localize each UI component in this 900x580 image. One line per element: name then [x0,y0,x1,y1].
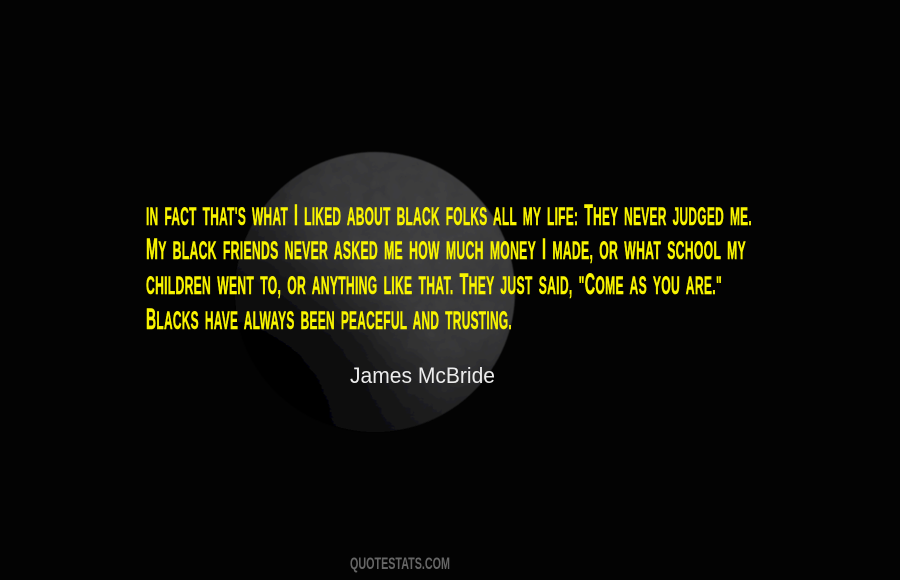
quote card [146,152,751,572]
author: James McBride [350,363,495,388]
quote text: BLACKS HAVE ALWAYS BEEN PEACEFUL AND TRUSTING. [146,303,512,336]
quote text: CHILDREN WENT TO, OR ANYTHING LIKE THAT. THEY JUST SAID, "COME AS YOU ARE." [146,268,722,301]
source credit: QUOTESTATS.COM [350,554,450,573]
quote text [146,199,752,336]
moon [234,151,516,433]
